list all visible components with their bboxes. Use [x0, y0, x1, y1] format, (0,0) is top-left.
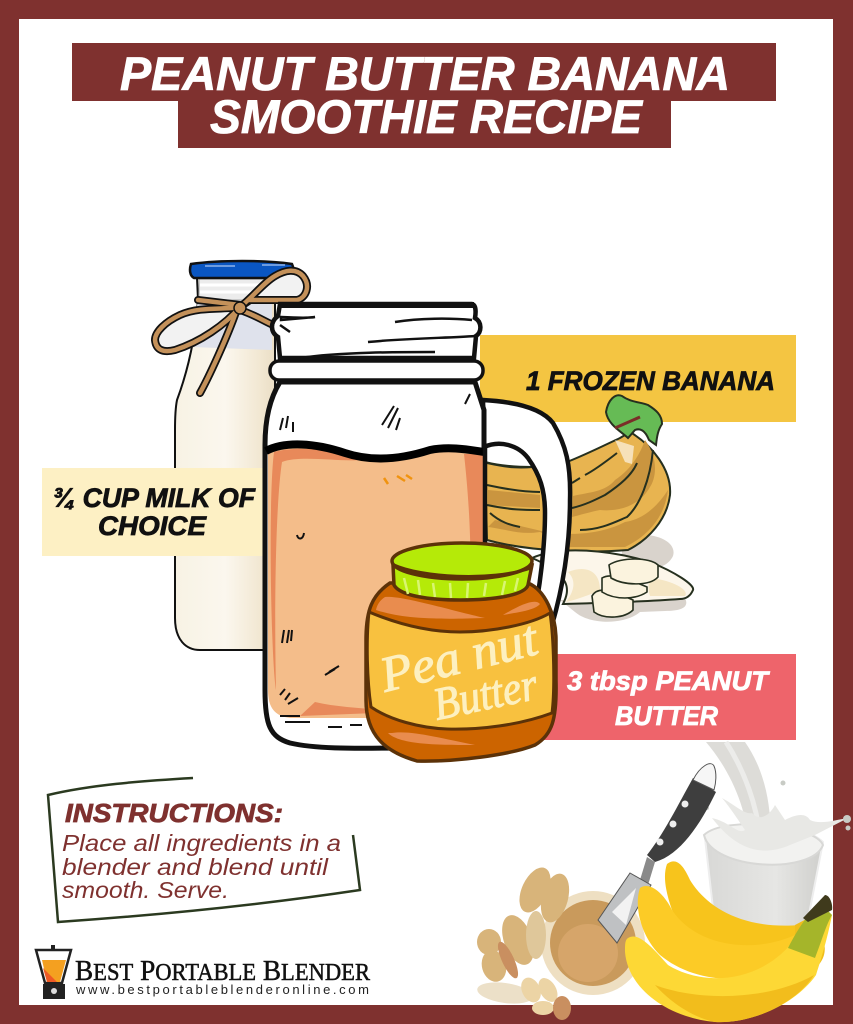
- icon: milk bottle: [155, 261, 307, 650]
- logo: Best Portable Blender: BEST PORTABLE BLENDER: [75, 955, 370, 987]
- milk stream: [706, 742, 770, 845]
- jar neck ring: [270, 361, 483, 380]
- instructions body text: smooth. Serve.: [62, 877, 229, 903]
- icon: mason jar: [265, 304, 570, 748]
- banana stem top: [788, 905, 832, 958]
- instructions callout: [48, 778, 360, 922]
- instructions frame: [48, 778, 360, 922]
- title: SMOOTHIE RECIPE: [210, 90, 644, 143]
- jar lid: [272, 304, 480, 358]
- banana peel: [532, 550, 693, 604]
- photo: peanut butter jar: [541, 891, 645, 995]
- photo: milk splash in glass: [704, 742, 851, 935]
- icon: peanut butter jar: [366, 543, 556, 761]
- front banana: [625, 905, 832, 1022]
- twine bow: [155, 271, 307, 393]
- banana stem: [606, 395, 662, 445]
- jar label script: Pea nut: [373, 609, 544, 703]
- jar handle: [483, 400, 570, 625]
- logo: Best Portable Blender: [36, 945, 370, 999]
- banana label background: [480, 335, 796, 422]
- label: peanut butter: 3 tbsp PEANUT: [567, 666, 771, 696]
- photo: knife: [598, 764, 716, 943]
- middle banana: [638, 886, 795, 979]
- label: milk: CHOICE: [98, 511, 207, 541]
- banana slices: [592, 559, 658, 617]
- jar sketch marks: [280, 394, 470, 727]
- instructions callout: INSTRUCTIONS:: [65, 798, 283, 828]
- label: peanut butter: [567, 666, 771, 731]
- label: milk: [53, 483, 256, 541]
- slice shadow: [560, 535, 686, 622]
- jar body: [265, 382, 484, 748]
- title: [72, 43, 776, 148]
- bottle cap: [190, 261, 293, 278]
- instructions body text: Place all ingredients in a: [62, 830, 341, 856]
- icon: bananas and slices: [485, 395, 693, 622]
- peanut butter jar body: [366, 583, 556, 761]
- label: banana: 1 FROZEN BANANA: [526, 366, 775, 396]
- icon: blender: [36, 945, 71, 999]
- instructions body text: blender and blend until: [62, 854, 329, 880]
- photo: banana bunch: [625, 861, 832, 1022]
- milk label background: [42, 468, 272, 556]
- instructions body text: [62, 830, 341, 903]
- liquid surface line: [266, 444, 484, 459]
- photo: peanuts: [476, 863, 574, 1020]
- label: milk: ¾ CUP MILK OF: [53, 483, 256, 513]
- banana bunch: [485, 432, 670, 551]
- peanut butter jar label: [367, 612, 554, 729]
- logo: Best Portable Blender: www.bestportableblenderonline.com: [75, 982, 369, 997]
- milk glass: [705, 825, 823, 935]
- title: PEANUT BUTTER BANANA: [120, 47, 730, 100]
- peanut butter jar lid: [393, 565, 532, 600]
- label: peanut butter: BUTTER: [615, 701, 718, 731]
- smoothie fill: [268, 444, 484, 718]
- jar label script: Butter: [428, 658, 543, 730]
- milk splash: [712, 798, 848, 851]
- back banana: [665, 861, 800, 962]
- pink label background: [540, 654, 796, 740]
